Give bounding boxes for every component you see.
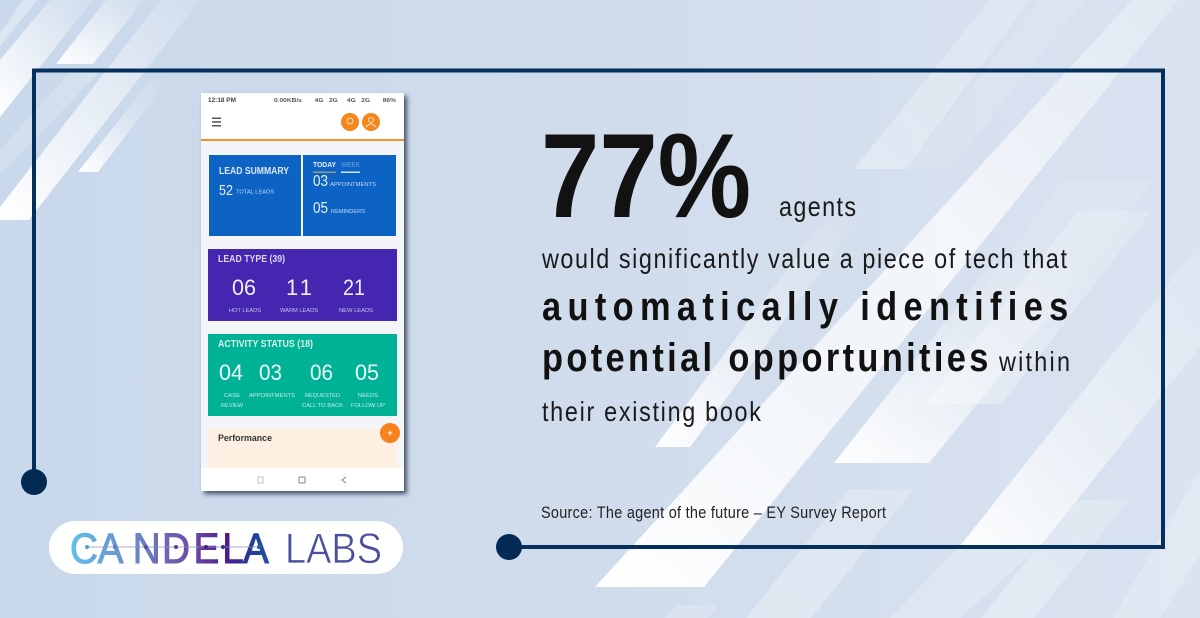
- panel: activity status: [208, 334, 397, 416]
- frame dot left: [21, 469, 47, 495]
- panel: lead type: 06: [232, 275, 256, 300]
- panel: lead type: [208, 249, 397, 321]
- status bar and app header: 0.00KB/s 4G 2G 4G 2G 86%: [274, 98, 396, 104]
- panel: lead summary: [209, 155, 301, 236]
- text: their existing book: their existing book: [542, 397, 761, 427]
- emphasis: automatically identifies: automatically identifies: [542, 284, 1068, 329]
- panel: activity status: CALL TO BACK: [302, 403, 343, 409]
- status bar and app header: [201, 93, 404, 141]
- headline statistic: 77%: 77%: [541, 109, 751, 243]
- panel: activity status: ACTIVITY STATUS (18): [218, 339, 313, 350]
- source note: Source: The agent of the future – EY Survey Report: [541, 504, 887, 522]
- frame dot bottom: [496, 534, 522, 560]
- panel: activity status: CASE: [224, 393, 240, 399]
- panel: lead type: LEAD TYPE (39): [218, 254, 285, 265]
- panel: activity status: 06: [310, 360, 333, 385]
- floating add button: +: [387, 428, 393, 438]
- panel: activity status: REVIEW: [221, 403, 244, 409]
- frame with end dots: [21, 70, 1163, 560]
- panel: activity status: APPOINTMENTS: [249, 393, 295, 399]
- logo: Candela Labs: A: [243, 524, 269, 572]
- panel: today and week: 03: [313, 173, 328, 190]
- logo: Candela Labs: [49, 521, 403, 574]
- panel: performance: Performance: [218, 433, 272, 444]
- logo: Candela Labs: D: [162, 524, 190, 572]
- text: would significantly value: would significantly value a piece of tech that: [541, 244, 1067, 274]
- phone navigation bar: [201, 468, 404, 491]
- phone shadow: [204, 96, 407, 494]
- panel: performance: [208, 429, 397, 468]
- panel: activity status: FOLLOW UP: [351, 403, 385, 409]
- logo: Candela Labs: LABS: [285, 525, 382, 573]
- logo: Candela Labs: E: [194, 524, 219, 572]
- panel: today and week: WEEK: [341, 160, 360, 169]
- panel: lead summary: 52: [219, 183, 233, 199]
- panel: activity status: NEEDS: [358, 393, 378, 399]
- panel: activity status: REQUESTED: [305, 393, 340, 399]
- panel: activity status: 03: [259, 360, 282, 385]
- emphasis: potential opportunities: potential opportunities: [542, 335, 988, 380]
- panel: lead type: 21: [343, 275, 365, 300]
- logo: Candela Labs: L: [222, 524, 244, 572]
- logo: Candela Labs: A: [98, 524, 124, 572]
- panel: today and week: [303, 155, 396, 236]
- text: within: within: [998, 347, 1070, 377]
- panel: today and week: APPOINTMENTS: [330, 182, 376, 188]
- panel: lead type: HOT LEADS: [229, 308, 261, 314]
- floating add button: [380, 423, 400, 443]
- panel: lead summary: LEAD SUMMARY: [219, 166, 289, 177]
- logo: Candela Labs: N: [133, 524, 161, 572]
- panel: activity status: 05: [355, 360, 379, 385]
- status bar and app header: 12:18 PM: [208, 97, 236, 104]
- logo: Candela Labs: C: [70, 524, 98, 572]
- panel: today and week: TODAY: [313, 160, 336, 169]
- panel: today and week: REMINDERS: [331, 209, 365, 215]
- panel: today and week: 05: [313, 200, 328, 217]
- panel: lead type: 11: [286, 275, 312, 300]
- text: agents: agents: [779, 192, 856, 222]
- phone screenshot: [201, 93, 404, 491]
- panel: lead summary: TOTAL LEADS: [236, 190, 274, 196]
- panel: activity status: 04: [219, 360, 243, 385]
- panel: lead type: WARM LEADS: [280, 308, 318, 314]
- panel: lead type: NEW LEADS: [339, 308, 373, 314]
